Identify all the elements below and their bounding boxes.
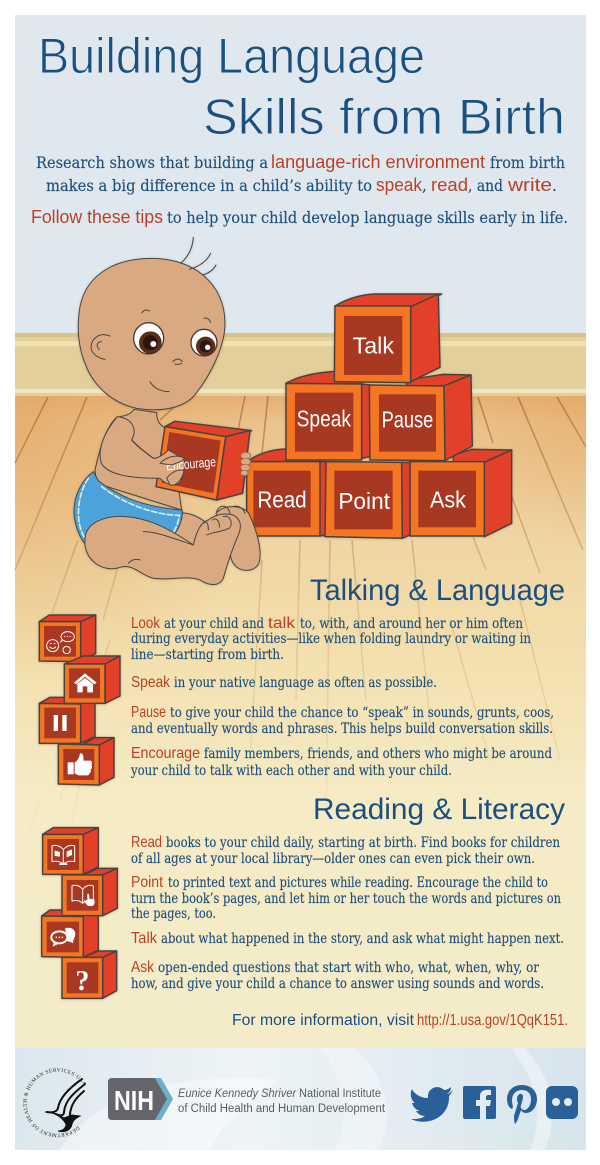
tip: encourage [130,745,552,779]
intro text: Research shows that building a [36,154,268,172]
icon block: home [64,656,120,703]
more information link [232,1012,568,1029]
block: Point: Point [338,488,390,514]
tips: talking and language [130,615,554,779]
icon block: chat [42,910,98,957]
tip: look and talk: to, with, and around her or him often [300,616,523,632]
intro text: speak [376,175,423,195]
institute name: Eunice Kennedy Shriver National Institute [178,1088,381,1100]
icon block: open book [43,828,98,874]
block: Ask [410,449,512,537]
institute name [178,1088,386,1115]
far foot [216,507,260,570]
HHS seal [23,1068,86,1138]
title: Skills from Birth [203,89,565,145]
tips: reading and literacy [131,834,564,992]
fingers behind block [241,452,251,476]
more information link: http://1.usa.gov/1QqK151. [417,1012,568,1029]
tip: look and talk: at your child and [164,616,264,632]
block: Speak [286,371,370,460]
icon: facebook [463,1086,496,1119]
tip: read: of all ages at your local library—older ones can even pick their own. [131,851,535,867]
icon: flickr [546,1086,578,1119]
tip: speak: in your native language as often as possible. [174,675,437,691]
icon: twitter [411,1087,453,1122]
icon blocks: reading and literacy [42,828,117,998]
intro text [31,152,568,227]
tip: point: Point [131,874,163,891]
head [78,258,225,410]
block pyramid [247,294,512,538]
title [38,28,565,145]
tip: look and talk: Look [131,615,161,632]
tip: look and talk: during everyday activities—like when folding laundry or waiting in [131,631,531,647]
icon block: thumbs up [58,738,114,785]
baby illustration [74,237,260,585]
block: Read [247,449,323,536]
block: Speak: Speak [297,406,351,432]
left eye [134,323,164,354]
baseboard [15,333,586,396]
tip: pause [131,704,554,737]
intro text: read [431,175,468,195]
panel: wooden floor [15,396,586,1048]
held block [100,417,252,500]
tip: pause: Pause [131,704,166,721]
heading: Talking & Language: Talking & Language [310,574,565,607]
title: Building Language [38,28,425,84]
intro text: makes a big difference in a child’s ability to [46,177,372,195]
tip: pause: to give your child the chance to “speak” in sounds, grunts, coos, [170,705,554,721]
face details [142,310,211,392]
tip: read [131,834,560,867]
tip: talk: Talk [131,930,158,947]
tip: encourage: family members, friends, and others who might be around [204,746,552,762]
icon: pinterest [507,1085,537,1124]
fingers [132,440,184,485]
block: Point [320,462,410,538]
right leg stub [173,513,208,550]
arm and hand [100,417,184,485]
toes [128,506,245,563]
tip: look and talk [131,615,531,663]
tip: look and talk: talk [268,615,296,632]
tip: encourage: Encourage [131,745,200,762]
NIH logo: NIH [114,1085,154,1116]
icon block: faces [39,615,96,662]
intro text: write [507,175,552,195]
eagle [45,1079,85,1132]
tip: point: the pages, too. [131,906,216,922]
right eye [191,329,217,356]
more information link: For more information, visit [232,1012,415,1029]
hair [181,237,216,275]
tip: look and talk: line—starting from birth. [131,647,284,663]
tip: ask [131,959,544,992]
block: Ask: Ask [430,486,466,512]
tip: read: Read [131,834,162,851]
icon blocks: talking and language [39,615,120,785]
icon block: question mark [62,951,117,998]
torso [95,409,182,510]
block: Talk [334,294,442,383]
near leg and foot [85,514,240,585]
seal ring text: DEPARTMENT OF HEALTH & HUMAN SERVICES·USA [23,1068,86,1138]
ear [91,335,110,359]
block: Pause [369,374,472,461]
tip: point [131,874,561,922]
icon block: book with pointing hand [62,868,117,916]
intro text: , and [468,177,503,195]
tip: ask: open-ended questions that start with who, what, when, why, or [158,960,539,976]
heading: Reading & Literacy: Reading & Literacy [313,793,565,826]
footer panel [15,1048,586,1150]
NIH logo [108,1078,173,1120]
intro text: Follow these tips [31,207,163,227]
icon block: question mark: ? [75,966,89,997]
intro text: language-rich environment [271,152,485,172]
tip: ask: how, and give your child a chance to answer using sounds and words. [131,976,544,992]
block: Read: Read [257,486,307,512]
block: Talk: Talk [353,332,394,358]
intro text: from birth [490,154,565,172]
institute name: of Child Health and Human Development [178,1103,386,1115]
intro text: to help your child develop language skills early in life. [167,209,568,227]
icon block: pause [39,697,95,743]
panel: wall background [15,15,586,335]
tip: encourage: your child to talk with each other and with your child. [130,763,452,779]
block: Pause: Pause [382,406,433,432]
held block: Encourage [165,454,216,474]
intro text: , [422,177,427,195]
diaper [74,472,182,545]
tip: speak: Speak [131,674,171,691]
tip: ask: Ask [131,959,155,976]
intro text: . [552,177,557,195]
